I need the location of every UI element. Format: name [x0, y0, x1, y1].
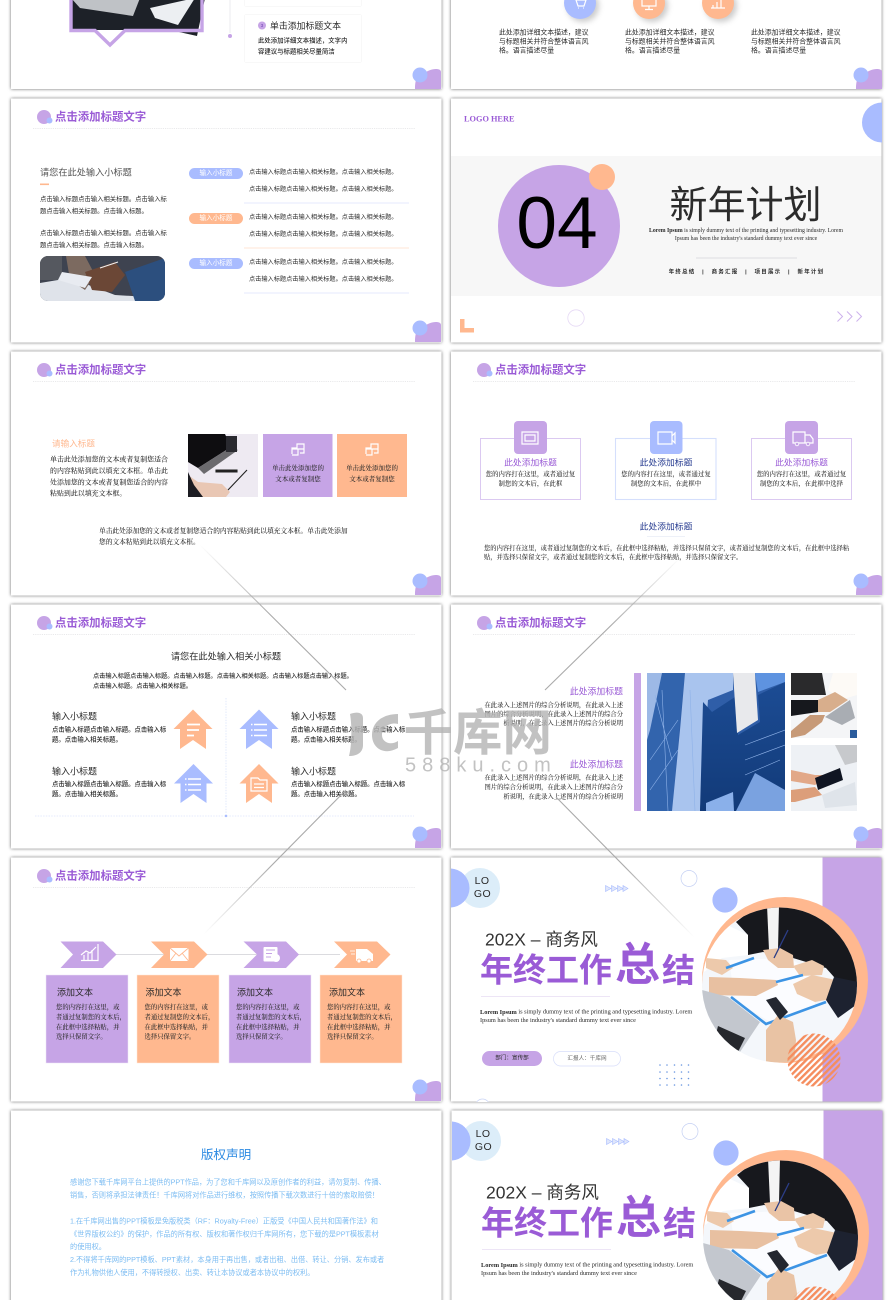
section description: [649, 227, 843, 242]
pill: department: 部门：宣传部: [495, 1054, 529, 1062]
text block: [50, 438, 168, 498]
pill: department: [482, 1051, 542, 1066]
item: top right: 输入小标题: [291, 711, 336, 722]
header: 点击添加标题文字: [55, 110, 146, 124]
watermark: logo and site name: 千库网: [404, 706, 552, 761]
corner decoration: [412, 1080, 441, 1101]
card 4: [320, 975, 402, 1063]
number circle: [498, 164, 620, 287]
notice text: 的使用权。: [70, 1242, 106, 1251]
icon: cart: [564, 0, 596, 19]
body text: 您的内容打在这里，或者通过复制您的文本后，在此框中选择粘贴，并选择只保留文字，或者通过复制您的文本后，在此框中选择粘: [484, 543, 850, 553]
decoration: triangles: [606, 1138, 629, 1144]
corner decoration: [412, 826, 441, 848]
decoration: orange corner: [460, 319, 474, 332]
card 1: 您的内容打在这里，或者通过复: [486, 469, 576, 479]
title: 结: [662, 952, 695, 989]
title: 总: [615, 939, 660, 990]
photo: desk with laptop: [188, 434, 258, 497]
accent bar: [634, 673, 641, 811]
card 3: 您的内容打在这里，或: [236, 1002, 300, 1012]
text blocks: 此处添加标题: [570, 759, 623, 770]
left column text: 题点击输入相关标题。点击输入标题。: [40, 206, 148, 215]
item: top left: [52, 710, 212, 749]
text blocks: 析说明，在此录入上述图片的综合分析说明: [503, 792, 623, 802]
panel: slide image tiles: [11, 352, 442, 596]
section description: Ipsum has been the industry's standard dummy text ever since: [675, 236, 818, 242]
pill: reporter: 汇报人：千库网: [567, 1054, 607, 1062]
card 3: [752, 421, 852, 500]
panel: copyright notice: [11, 1110, 442, 1300]
pill rows: 点击输入标题点击输入相关标题。点击输入相关标题。: [249, 185, 398, 193]
text columns: 与标题相关并符合整体语言风: [499, 37, 589, 46]
card 3: 在此框中选择粘贴，并: [236, 1022, 300, 1032]
card 4: 您的内容打在这里，或: [327, 1002, 391, 1012]
corner decoration: [412, 574, 441, 595]
intro text: 请您在此处输入相关小标题: [171, 651, 281, 662]
card 3: 制您的文本后，在此框中选择: [760, 479, 844, 489]
left column text: 题点击输入相关标题。点击输入标题。: [40, 240, 148, 249]
title: 年终工作: [481, 1205, 613, 1242]
header: [33, 869, 415, 888]
decoration: ring: [681, 870, 697, 886]
intro text: 点击输入标题。点击输入相关标题。: [93, 682, 192, 690]
card 3: [229, 975, 311, 1063]
text columns: 与标题相关并符合整体语言风: [625, 37, 715, 46]
item: top right: [240, 710, 406, 749]
header: [33, 110, 415, 128]
sub heading: [640, 521, 693, 536]
arrow: mail: [151, 942, 208, 968]
card 1: [46, 975, 128, 1063]
pill rows: 点击输入标题点击输入相关标题。点击输入相关标题。: [249, 258, 398, 266]
pill: reporter: [554, 1052, 620, 1066]
heading: 版权声明: [201, 1147, 251, 1162]
card: step 3: 单击添加标题文本: [270, 20, 341, 31]
card: step 3: 3: [261, 23, 264, 28]
notice text: 销售，否则将承担法律责任！千库网将对作品进行维权，按照传播下载次数进行十倍的索取赔偿！: [70, 1191, 379, 1200]
decoration: dot grid: [659, 1064, 689, 1086]
corner decoration: [854, 68, 882, 89]
card 2: [137, 975, 219, 1063]
sub heading: 此处添加标题: [640, 521, 693, 532]
text columns: 与标题相关并符合整体语言风: [751, 37, 841, 46]
card 2: 您的内容打在这里，或者通过复: [621, 469, 711, 479]
icon: monitor: [633, 0, 665, 19]
text block: 请输入标题: [52, 438, 95, 449]
card 1: 在此框中选择粘贴，并: [56, 1022, 120, 1032]
card 2: 您的内容打在这里，或: [144, 1002, 209, 1012]
card 2: 添加文本: [146, 987, 182, 998]
decoration: triangles: [606, 886, 628, 892]
left column text: 点击输入标题点击输入相关标题。点击输入标: [40, 194, 168, 203]
header: 点击添加标题文字: [55, 363, 146, 377]
card 1: 您的内容打在这里，或: [56, 1002, 120, 1012]
section description: Lorem Ipsum is simply dummy text of the printing and typesetting industry. Lorem: [649, 227, 843, 234]
card 2: [616, 421, 716, 500]
panel: slide three cards: [451, 352, 882, 596]
panel: section 04 divider: [451, 98, 892, 342]
text columns: 格。语言描述尽量: [751, 46, 806, 55]
text block: bottom: 单击此处添加您的文本或者复制您适合的内容粘贴到此以填充文本框。单击此处添加: [99, 526, 348, 535]
text blocks: 在此录入上述图片的综合分析说明，在此录入上述: [484, 773, 624, 783]
title: [480, 930, 695, 990]
card 4: 者通过复制您的文本后，: [327, 1012, 397, 1022]
icon: bar chart: [702, 0, 734, 19]
card 2: 在此框中选择粘贴，并: [144, 1022, 209, 1032]
corner decoration: [412, 320, 441, 342]
item: top right: 点击输入标题点击输入标题。点击输入标: [291, 725, 406, 734]
watermark: diagonal lines: [200, 545, 694, 937]
watermark: logo and site name: [349, 706, 557, 777]
card 3: 您的内容打在这里，或者通过复: [757, 469, 847, 479]
pill rows: 输入小标题: [200, 168, 233, 177]
card 4: 选择只保留文字。: [327, 1032, 378, 1041]
section title: 新年计划: [669, 174, 822, 229]
pill rows: 点击输入标题点击输入相关标题。点击输入相关标题。: [249, 230, 398, 238]
item: bottom right: 题。点击输入相关标题。: [291, 789, 361, 798]
panel: closing cover slide: [430, 858, 882, 1113]
title: [481, 1183, 696, 1243]
logo badge: LO: [476, 1128, 490, 1140]
text columns: 此处添加详细文本描述，建议: [499, 28, 589, 37]
card 1: 此处添加标题: [504, 457, 557, 468]
card 2: 者通过复制您的文本后，: [144, 1012, 214, 1022]
body text: 贴，并选择只保留文字，或者通过复制您的文本后，在此框中选择粘贴，并选择只保留文字。: [484, 552, 742, 562]
item: bottom right: 输入小标题: [291, 766, 336, 777]
text blocks: 析说明，在此录入上述图片的综合分析说明: [503, 718, 623, 728]
card: step 3: 此处添加详细文本描述，文字内: [258, 36, 347, 45]
item: top left: 点击输入标题点击输入标题。点击输入标: [52, 725, 167, 734]
card: step 3: 容建议与标题相关尽量简洁: [258, 47, 335, 56]
text blocks: 图片的综合分析说明，在此录入上述图片的综合分: [484, 782, 624, 792]
arrow: chart: [60, 942, 116, 968]
logo text: LOGO HERE: [464, 115, 515, 124]
card 2: 此处添加标题: [640, 457, 693, 468]
text columns: 格。语言描述尽量: [499, 46, 554, 55]
description: Lorem Ipsum is simply dummy text of the printing and typesetting industry. Lorem: [480, 1009, 692, 1016]
text blocks: 在此录入上述图片的综合分析说明，在此录入上述: [484, 700, 624, 710]
notice text: 作为礼物供他人使用，不得转授权、出卖、转让本协议或者本协议中的权利。: [70, 1268, 314, 1277]
card 1: 添加文本: [57, 987, 93, 998]
panel: slide top left (partial): [11, 0, 442, 89]
panel: slide four arrows: [11, 604, 442, 848]
card: step 3: [245, 0, 361, 62]
header: 点击添加标题文字: [495, 363, 586, 377]
text block: 粘贴到此以填充文本框。: [50, 489, 126, 498]
intro text: [93, 651, 353, 690]
tile: orange: 单击此处添加您的: [346, 463, 398, 472]
pill rows: 输入小标题: [200, 258, 233, 267]
title: 结: [663, 1205, 696, 1242]
card 2: 制您的文本后，在此框中: [631, 479, 701, 489]
panel: repeated cover slide: [432, 1110, 882, 1300]
decoration: chevrons: [838, 312, 862, 322]
card 1: 选择只保留文字。: [56, 1032, 107, 1041]
band: purple: [822, 858, 882, 1102]
description: Lorem Ipsum is simply dummy text of the printing and typesetting industry. Lorem: [481, 1262, 693, 1269]
number circle: 04: [516, 183, 598, 264]
text columns: 格。语言描述尽量: [625, 46, 680, 55]
intro text: 点击输入标题点击输入标题。点击输入标题。点击输入相关标题。点击输入标题点击输入标题。: [93, 672, 353, 680]
pill rows: 点击输入标题点击输入相关标题。点击输入相关标题。: [249, 275, 398, 283]
watermark: logo and site name: 588ku.com: [405, 755, 557, 777]
panel: slide process flow: [11, 858, 442, 1102]
text columns: 此处添加详细文本描述，建议: [625, 28, 715, 37]
card 3: 此处添加标题: [775, 457, 828, 468]
pill rows: 输入小标题: [200, 213, 233, 222]
title: 202X – 商务风: [485, 930, 598, 950]
logo badge: GO: [475, 1141, 492, 1153]
photo: team at desk: [40, 256, 165, 301]
timeline connector: [228, 0, 232, 38]
panel: slide photo collage: [451, 604, 882, 848]
left column text: 点击输入标题点击输入相关标题。点击输入标: [40, 228, 168, 237]
card 4: 在此框中选择粘贴，并: [327, 1022, 391, 1032]
logo badge: [452, 1121, 501, 1161]
corner decoration: [854, 574, 882, 595]
dividers: [35, 698, 414, 817]
logo badge: GO: [474, 888, 491, 900]
text block: bottom: 您的文本粘贴到此以填充文本框。: [99, 537, 200, 546]
card 3: 添加文本: [237, 987, 273, 998]
photo: meeting 1: [791, 673, 857, 738]
decoration: ring: [568, 310, 584, 326]
card 1: 者通过复制您的文本后，: [56, 1012, 126, 1022]
text blocks: 图片的综合分析说明，在此录入上述图片的综合分: [484, 709, 624, 719]
card 1: [480, 421, 580, 500]
description: Ipsum has been the industry's standard dummy text ever since: [481, 1270, 637, 1277]
header: [33, 363, 415, 382]
card 3: 选择只保留文字。: [236, 1032, 287, 1041]
item: bottom left: 题。点击输入相关标题。: [52, 789, 122, 798]
photo circle: [701, 1150, 869, 1300]
card 2: 选择只保留文字。: [144, 1032, 195, 1041]
notice text: 1.在千库网出售的PPT模板是免版税类（RF：Royalty-Free）正版受《中国人民共和国著作法》和: [70, 1217, 378, 1226]
tile: orange: [337, 434, 407, 497]
left column text: [40, 167, 168, 249]
description: [480, 1009, 692, 1024]
corner decoration: [854, 826, 882, 848]
card 1: 制您的文本后，在此框: [499, 479, 563, 489]
band: purple: [824, 1110, 882, 1300]
text columns: 此处添加详细文本描述，建议: [751, 28, 841, 37]
nav labels: 年终总结 | 商务汇报 | 项目展示 | 新年计划: [669, 268, 824, 276]
panel: slide text list: [11, 98, 442, 342]
text blocks: [484, 686, 624, 802]
item: bottom left: 点击输入标题点击输入标题。点击输入标: [52, 779, 167, 788]
description: Ipsum has been the industry's standard dummy text ever since: [480, 1017, 636, 1024]
notice text: 2.不得将千库网的PPT模板、PPT素材，本身用于再出售，或者出租、出借、转让、分销、发布或者: [70, 1255, 384, 1264]
notice text: [70, 1178, 386, 1277]
logo badge: [451, 868, 500, 1102]
tile: orange: 文本或者复制您: [349, 474, 395, 483]
header: [33, 616, 415, 634]
notice text: 《世界版权公约》的保护，作品的所有权、版权和著作权归千库网所有，您下载的是PPT模板素材: [70, 1230, 379, 1239]
pill rows: 点击输入标题点击输入相关标题。点击输入相关标题。: [249, 213, 398, 221]
text block: 处添加您的文本或者复制您适合的内容: [50, 478, 168, 487]
pill rows: [189, 168, 409, 293]
header: [473, 616, 855, 634]
header: 点击添加标题文字: [495, 616, 586, 630]
item: bottom right: 点击输入标题点击输入标题。点击输入标: [291, 779, 406, 788]
title: 202X – 商务风: [486, 1183, 599, 1203]
tile: purple: [263, 434, 332, 497]
header: [473, 363, 855, 382]
logo badge: LO: [475, 875, 489, 887]
notice text: 感谢您下载千库网平台上提供的PPT作品，为了您和千库网以及原创作者的利益，请勿复制、传播、: [70, 1178, 386, 1187]
body text: [484, 543, 850, 562]
photo: laptop in speech frame: [71, 0, 205, 45]
text blocks: 此处添加标题: [570, 686, 623, 697]
photo: glass buildings: [647, 673, 785, 811]
item: top left: 题。点击输入相关标题。: [52, 735, 122, 744]
tile: purple: 单击此处添加您的: [272, 463, 324, 472]
decoration: blue circle: [862, 102, 882, 142]
description: [481, 1262, 693, 1277]
photo: meeting 2: [791, 745, 857, 811]
decoration: blue circle: [713, 1140, 739, 1166]
text columns: [499, 28, 841, 55]
card 4: 添加文本: [329, 987, 365, 998]
decoration: blue circle: [712, 887, 738, 913]
arrow: delivery: [334, 942, 390, 968]
title: 总: [616, 1192, 661, 1243]
item: top left: 输入小标题: [52, 711, 97, 722]
text block: bottom: [99, 526, 348, 546]
item: bottom right: [240, 764, 406, 803]
arrow: checklist: [244, 942, 299, 968]
grey band: [451, 156, 882, 296]
text block: 单击此处添加您的文本或者复制您适合: [50, 455, 168, 464]
header: 点击添加标题文字: [55, 869, 146, 883]
item: bottom left: [52, 764, 213, 803]
watermark icon: [349, 713, 398, 756]
corner decoration: [412, 68, 441, 89]
left column text: 请您在此处输入小标题: [40, 167, 132, 178]
decoration: ring: [682, 1124, 698, 1140]
pill rows: 点击输入标题点击输入相关标题。点击输入相关标题。: [249, 168, 398, 176]
connector line: [110, 954, 340, 956]
header: 点击添加标题文字: [55, 616, 146, 630]
text block: 的内容粘贴到此以填充文本框。单击此: [50, 466, 168, 475]
tile: purple: 文本或者复制您: [275, 474, 321, 483]
item: bottom left: 输入小标题: [52, 766, 97, 777]
title: 年终工作: [480, 952, 612, 989]
panel: slide top right (partial): [451, 0, 882, 89]
photo circle: [700, 897, 868, 1086]
card 3: 者通过复制您的文本后，: [236, 1012, 306, 1022]
item: top right: 题。点击输入相关标题。: [291, 735, 361, 744]
